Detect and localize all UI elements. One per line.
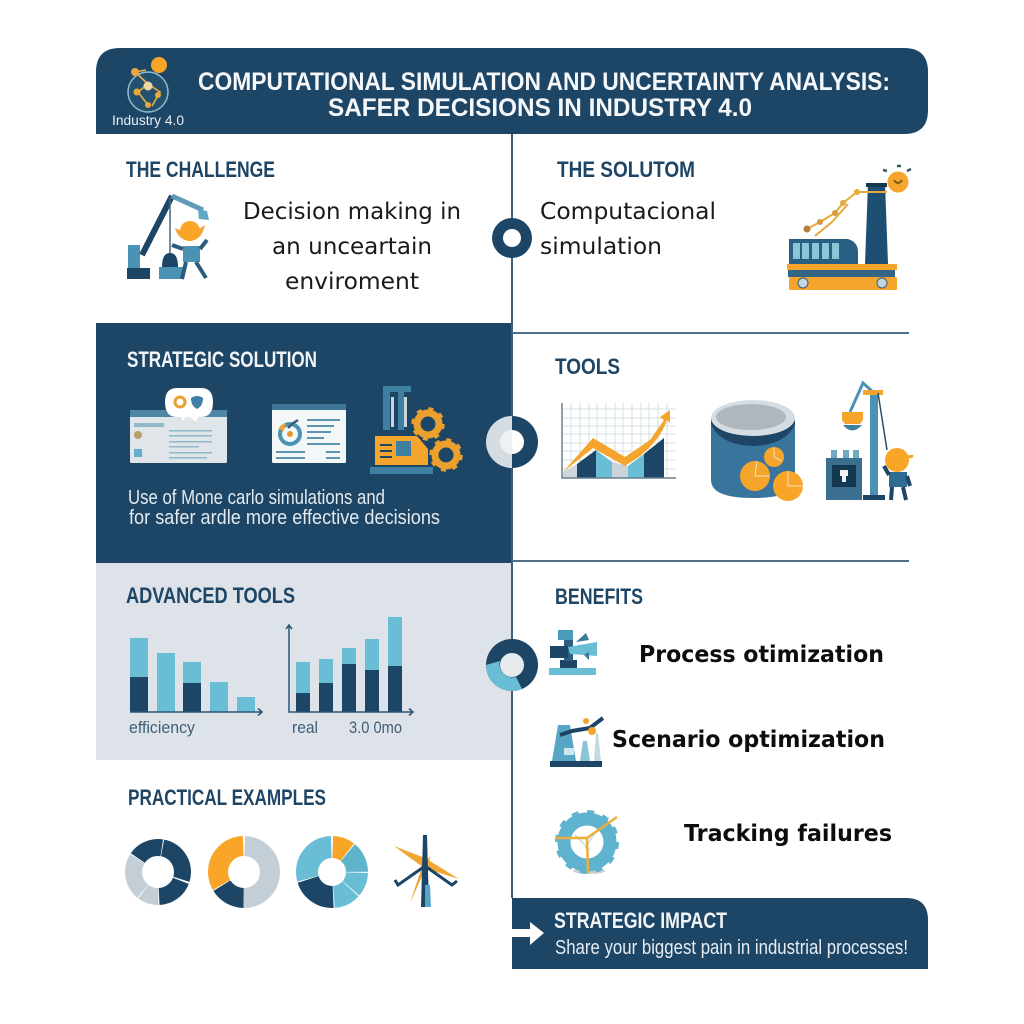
heading: strategic impact: STRATEGIC IMPACT <box>554 908 727 933</box>
icon: scenario factory <box>550 718 603 767</box>
text: process optimization: Process otimization <box>639 642 884 668</box>
marker: benefits node <box>486 639 538 691</box>
icon: crane and worker <box>127 196 209 279</box>
chart: line and area chart <box>562 403 676 478</box>
label: 3.0 0mo: 3.0 0mo <box>349 718 402 737</box>
title line 2: SAFER DECISIONS IN INDUSTRY 4.0 <box>328 94 752 122</box>
icon: factory machine <box>787 166 911 290</box>
chart: donut 3 <box>307 847 357 897</box>
text: challenge: enviroment <box>285 269 419 295</box>
label: efficiency: efficiency <box>129 718 195 737</box>
heading: the challenge: THE CHALLENGE <box>126 157 275 182</box>
heading: benefits: BENEFITS <box>555 584 643 609</box>
text: solution <box>540 199 716 260</box>
icon: process machine <box>549 630 597 675</box>
icon: gear with turbine <box>556 812 617 874</box>
text: scenario optimization: Scenario optimization <box>612 727 885 753</box>
chart: real bars <box>286 617 413 716</box>
label: real: real <box>292 718 318 737</box>
header banner <box>96 48 928 134</box>
text: tracking failures: Tracking failures <box>684 821 892 847</box>
title line 1: COMPUTATIONAL SIMULATION AND UNCERTAINTY ANALYSIS: <box>198 68 890 96</box>
arrow <box>512 922 544 945</box>
text: strategic solution: Use of Mone carlo simulations and <box>128 487 385 509</box>
panel: strategic solution background <box>96 323 512 563</box>
text: solution: Computacional <box>540 199 716 225</box>
text: call to action: Share your biggest pain in industrial processes! <box>555 937 908 959</box>
vertical timeline line <box>511 134 513 898</box>
heading: advanced tools: ADVANCED TOOLS <box>126 583 295 608</box>
heading: strategic solution: STRATEGIC SOLUTION <box>127 347 317 372</box>
marker: tools node <box>486 416 538 468</box>
text: strategic solution: for safer ardle more effective decisions <box>129 507 440 529</box>
text: challenge: Decision making in <box>243 199 461 225</box>
icon: browser target card <box>272 404 346 463</box>
icon: dashboard card with chat bubble <box>130 388 227 463</box>
heading: tools: TOOLS <box>555 354 620 379</box>
heading: practical examples: PRACTICAL EXAMPLES <box>128 785 326 810</box>
panel: strategic impact banner <box>512 898 928 969</box>
text: challenge <box>243 199 461 295</box>
icon: data cylinder with pie charts <box>711 400 803 501</box>
heading: the solution: THE SOLUTOM <box>557 157 695 182</box>
marker: solution node <box>492 218 532 258</box>
logo label: Industry 4.0 <box>112 113 184 128</box>
text: solution: simulation <box>540 234 662 260</box>
text: strategic solution <box>128 487 440 529</box>
icon: wind turbine <box>394 835 459 907</box>
chart: efficiency bars <box>130 638 262 716</box>
text: challenge: an unceartain <box>272 234 432 260</box>
icon: machine with gears <box>370 386 461 474</box>
icon: crane, cabinet and worker <box>826 383 912 500</box>
icon: industry 4.0 globe <box>128 57 168 112</box>
panel: advanced tools background <box>96 563 512 760</box>
chart: donut 2 <box>218 846 270 898</box>
chart: donut 1 <box>134 848 182 896</box>
